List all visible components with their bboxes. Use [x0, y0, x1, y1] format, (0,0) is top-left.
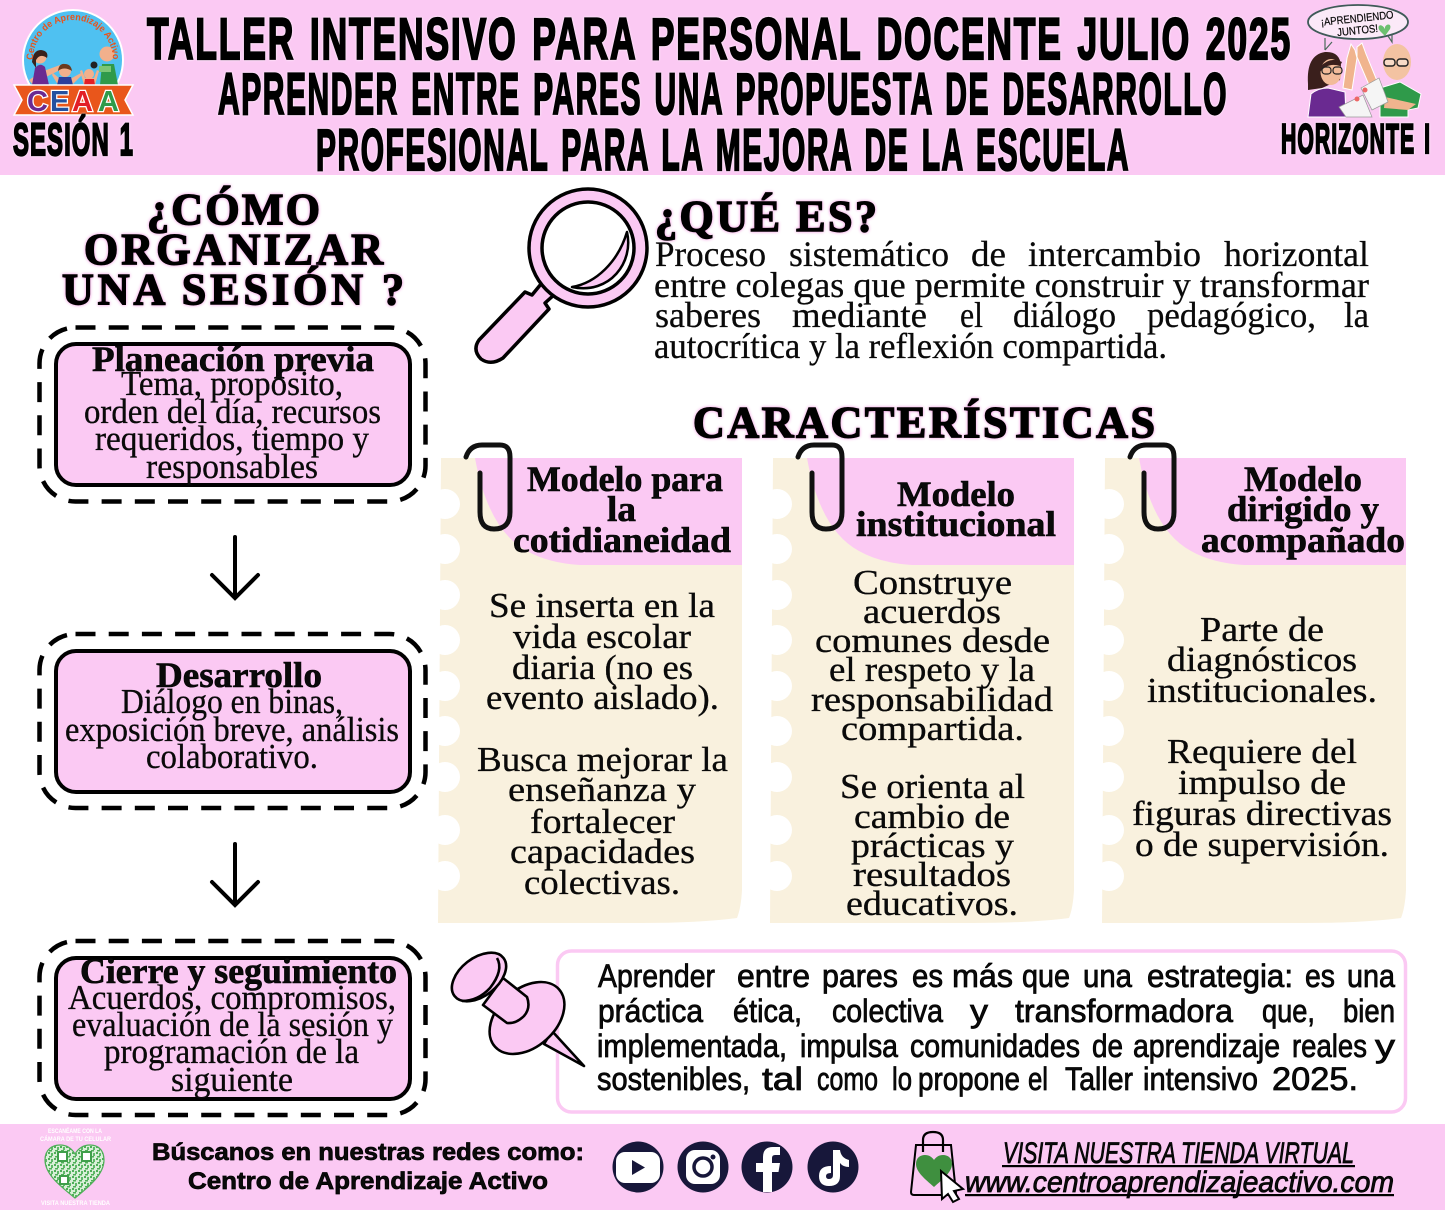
callout: conclusion: aprendizaje [1133, 1028, 1280, 1064]
icon: magnifying glass [476, 189, 647, 362]
callout: conclusion: como [817, 1061, 878, 1097]
heading: como organizar una sesion: UNA SESIÓN ? [62, 265, 404, 314]
panel: desarrollo: Desarrollo [156, 655, 322, 695]
callout: conclusion: reales [1292, 1028, 1367, 1064]
callout: conclusion: que [1022, 958, 1070, 994]
callout: conclusion: 2025. [1272, 1061, 1358, 1097]
panel: planeacion previa [40, 328, 426, 502]
panel: modelo institucional: comunes desde [815, 621, 1050, 660]
panel: modelo para la cotidianeidad: diaria (no es [512, 648, 693, 687]
callout: conclusion: lo [892, 1061, 912, 1097]
panel: modelo para la cotidianeidad: Modelo para [527, 459, 723, 499]
callout: conclusion: una [1347, 958, 1395, 994]
QR heart: VISITA NUESTRA TIENDA [41, 1200, 110, 1207]
text block: definicion: pedagógico, [1147, 295, 1316, 335]
text block: definicion [654, 234, 1369, 366]
text block: definicion: sistemático [789, 234, 949, 274]
panel: modelo institucional: Construye [853, 563, 1012, 602]
panel: modelo institucional: Se orienta al [840, 767, 1025, 806]
panel: modelo para la cotidianeidad: cotidianeidad [513, 520, 731, 560]
panel: modelo para la cotidianeidad: Busca mejorar la [477, 740, 728, 779]
panel: modelo para la cotidianeidad: capacidades [510, 832, 695, 871]
callout: conclusion: propone [918, 1061, 1020, 1097]
text block: definicion: entre colegas que permite construir y transformar [654, 265, 1369, 305]
callout: conclusion: de [1092, 1028, 1123, 1064]
text block: redes sociales [152, 1139, 584, 1195]
callout: conclusion: transformadora [1015, 993, 1233, 1029]
text block: definicion: Proceso [655, 234, 766, 274]
logo: Centro de Aprendizaje Activo [12, 9, 134, 118]
panel: modelo institucional [762, 445, 1074, 923]
panel: modelo dirigido y acompanado: acompañado [1201, 520, 1405, 560]
callout: conclusion: comunidades [910, 1028, 1080, 1064]
QR heart: ESCANÉAME CON LA [48, 1126, 102, 1135]
panel: cierre y seguimiento: programación de la [104, 1032, 359, 1071]
panel: modelo dirigido y acompanado [1094, 445, 1406, 923]
panel: modelo institucional: institucional [856, 504, 1056, 544]
panel: cierre y seguimiento: Acuerdos, compromisos, [68, 978, 396, 1017]
panel: cierre y seguimiento: Cierre y seguimiento [80, 951, 397, 991]
text block: definicion: saberes [655, 295, 761, 335]
panel: modelo institucional: Modelo [897, 474, 1015, 514]
arrow: planeacion to desarrollo [212, 537, 258, 598]
speech bubble: JUNTOS! [1337, 23, 1379, 39]
session label: SESIÓN 1 [13, 114, 134, 165]
icon: tiktok [808, 1142, 858, 1192]
icon: youtube [612, 1142, 664, 1192]
callout: conclusion: sostenibles, [597, 1061, 750, 1097]
title [147, 7, 1292, 183]
icon: green heart [1379, 25, 1390, 36]
text block: definicion: horizontal [1224, 234, 1369, 274]
text block: tienda virtual: www.centroaprendizajeactivo.com [965, 1166, 1394, 1199]
panel: desarrollo: Diálogo en binas, [121, 682, 343, 721]
panel: modelo dirigido y acompanado: dirigido y [1227, 489, 1379, 529]
panel: modelo para la cotidianeidad [430, 445, 742, 923]
callout: conclusion: estrategia: [1147, 958, 1293, 994]
heading: como organizar una sesion: ORGANIZAR [84, 225, 384, 274]
callout: conclusion: y [1375, 1028, 1395, 1064]
callout: conclusion: entre [737, 958, 810, 994]
heading: como organizar una sesion: ¿CÓMO [147, 185, 320, 234]
text block: definicion: el [960, 295, 983, 335]
callout: conclusion: Taller [1065, 1061, 1133, 1097]
panel: planeacion previa: Tema, propósito, [121, 364, 343, 403]
panel: modelo institucional: prácticas y [851, 826, 1015, 865]
panel: modelo institucional: acuerdos [863, 592, 1001, 631]
text block: definicion: diálogo [1013, 295, 1116, 335]
panel: modelo institucional: resultados [853, 855, 1011, 894]
panel: planeacion previa: Planeación previa [92, 339, 374, 379]
text block: definicion: autocrítica y la reflexión compartida. [654, 326, 1167, 366]
callout: conclusion: práctica [598, 993, 703, 1029]
logo banner: CEAA [27, 86, 119, 118]
callout: conclusion: bien [1343, 993, 1395, 1029]
footer band [0, 1124, 1445, 1210]
panel: planeacion previa: orden del día, recursos [84, 392, 381, 431]
speech bubble [1308, 5, 1408, 50]
panel: modelo institucional: cambio de [854, 797, 1010, 836]
panel: desarrollo [40, 634, 426, 808]
text block: redes sociales: Centro de Aprendizaje Activo [188, 1168, 548, 1195]
callout: conclusion: más [952, 958, 1013, 994]
panel: cierre y seguimiento [40, 941, 426, 1115]
panel: modelo institucional: responsabilidad [811, 680, 1054, 719]
panel: modelo dirigido y acompanado: o de supervisión. [1135, 825, 1389, 864]
panel: modelo para la cotidianeidad: vida escolar [513, 617, 691, 656]
panel: modelo dirigido y acompanado: Parte de [1200, 610, 1324, 649]
text block: tienda virtual [965, 1137, 1394, 1199]
heading: que es: ¿QUÉ ES? [655, 192, 877, 241]
text block: definicion: mediante [792, 295, 927, 335]
panel: modelo dirigido y acompanado: Requiere del [1167, 732, 1357, 771]
icon: instagram [678, 1142, 728, 1192]
callout: conclusion: impulsa [800, 1028, 898, 1064]
panel: cierre y seguimiento: evaluación de la sesión y [72, 1005, 393, 1044]
panel: modelo dirigido y acompanado: Modelo [1244, 459, 1362, 499]
callout: conclusion: tal [762, 1061, 803, 1097]
text block: definicion: de [971, 234, 1006, 274]
QR heart [40, 1126, 111, 1207]
panel: modelo dirigido y acompanado: figuras directivas [1132, 794, 1392, 833]
panel: modelo para la cotidianeidad: evento aislado). [486, 678, 719, 717]
panel: planeacion previa: responsables [146, 447, 318, 486]
panel: modelo institucional: el respeto y la [829, 650, 1035, 689]
callout: conclusion: pares [822, 958, 898, 994]
icon: shopping bag with heart and cursor [911, 1132, 963, 1202]
panel: modelo dirigido y acompanado: institucionales. [1147, 671, 1377, 710]
panel: desarrollo: exposición breve, análisis [65, 710, 399, 749]
panel: modelo institucional: educativos. [846, 884, 1018, 923]
callout: conclusion: implementada, [597, 1028, 787, 1064]
logo: Centro de Aprendizaje Activo: Centro de Aprendizaje Activo [26, 14, 118, 60]
icon: push pin [443, 943, 584, 1068]
callout: conclusion: es [1305, 958, 1335, 994]
text block: definicion: intercambio [1028, 234, 1201, 274]
panel: modelo para la cotidianeidad: Se inserta en la [489, 586, 715, 625]
illustration: teachers high five [1308, 43, 1421, 117]
callout: conclusion: que, [1262, 993, 1315, 1029]
callout: conclusion: ética, [733, 993, 802, 1029]
callout: conclusion: es [912, 958, 943, 994]
callout: conclusion: el [1028, 1061, 1048, 1097]
panel: modelo para la cotidianeidad: enseñanza y [508, 770, 697, 809]
text block: redes sociales: Búscanos en nuestras redes como: [152, 1139, 584, 1166]
heading: caracteristicas: CARACTERÍSTICAS [693, 398, 1155, 447]
panel: modelo dirigido y acompanado: impulso de [1178, 763, 1346, 802]
speech bubble: ¡APRENDIENDO [1320, 9, 1394, 29]
text block: definicion: la [1344, 295, 1369, 335]
heading: como organizar una sesion [62, 185, 404, 314]
panel: cierre y seguimiento: siguiente [171, 1060, 293, 1099]
callout: conclusion: y [970, 993, 988, 1029]
callout: conclusion: colectiva [832, 993, 943, 1029]
panel: modelo para la cotidianeidad: la [607, 489, 636, 529]
panel: modelo institucional: compartida. [841, 709, 1024, 748]
panel: modelo para la cotidianeidad: colectivas. [524, 863, 680, 902]
callout: conclusion [558, 951, 1406, 1112]
header band [0, 0, 1445, 175]
arrow: desarrollo to cierre [212, 844, 258, 905]
QR heart: CÁMARA DE TU CELULAR [40, 1134, 111, 1143]
panel: desarrollo: colaborativo. [146, 737, 318, 776]
callout: conclusion: una [1083, 958, 1132, 994]
icon: facebook [742, 1142, 792, 1192]
panel: modelo dirigido y acompanado: diagnósticos [1167, 640, 1357, 679]
panel: planeacion previa: requeridos, tiempo y [95, 419, 369, 458]
callout: conclusion: Aprender [598, 958, 715, 994]
panel: modelo para la cotidianeidad: fortalecer [530, 802, 675, 841]
callout: conclusion: intensivo [1143, 1061, 1258, 1097]
